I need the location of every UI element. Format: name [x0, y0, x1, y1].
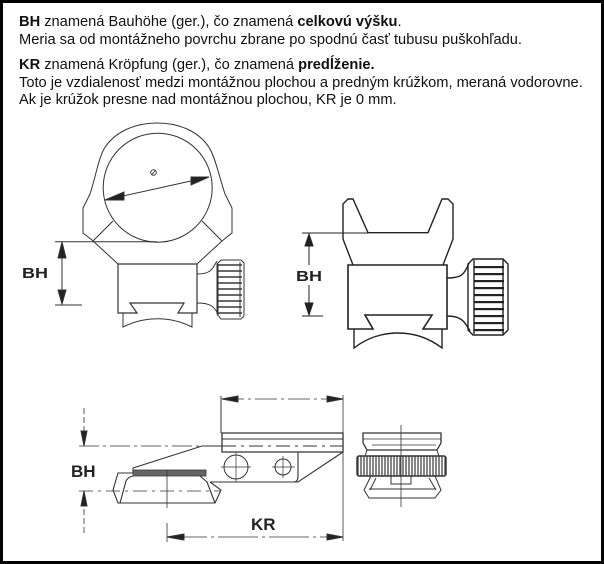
text block: BH definition: Meria sa od montážneho povrchu zbrane po spodnú časť tubusu puškohľadu. [19, 32, 522, 48]
diameter arrow [105, 177, 209, 200]
BH label: BH [296, 268, 322, 285]
ring clamp [113, 470, 221, 503]
BH dimension [55, 242, 157, 305]
center and axis lines [167, 395, 343, 542]
diameter symbol [151, 170, 156, 175]
drawing: front view of ring mount [22, 123, 244, 327]
arm [222, 433, 343, 452]
text block: KR definition [19, 55, 583, 108]
knob [197, 260, 244, 319]
drawing: top view with extension arm [71, 395, 343, 542]
text block: KR definition: KR znamená Kröpfung (ger.), čo znamená predĺženie. [19, 57, 375, 73]
BH dimension [302, 233, 368, 316]
BH dimension [79, 408, 202, 533]
BH label: BH [71, 462, 96, 481]
rail [123, 313, 192, 327]
ring stub [343, 199, 453, 265]
text block: KR definition: Ak je krúžok presne nad montážnou plochou, KR je 0 mm. [19, 92, 397, 108]
knurled wheel [357, 456, 446, 476]
drawing: side view with cut ring [296, 199, 508, 348]
scope tube circle [103, 133, 212, 242]
rail [354, 329, 442, 348]
text block: BH definition: BH znamená Bauhöhe (ger.), čo znamená celkovú výšku. [19, 14, 402, 30]
upper length dimension [221, 396, 343, 433]
text block: BH definition [19, 14, 522, 48]
screw holes [221, 452, 295, 482]
KR label: KR [251, 515, 276, 534]
ring housing [83, 123, 232, 264]
drawing: end view of ring [357, 425, 446, 507]
knob [447, 259, 508, 335]
text block: KR definition: Toto je vzdialenosť medzi montážnou plochou a predným krúžkom, meraná vodorovne. [19, 74, 583, 90]
BH label: BH [22, 265, 48, 282]
KR dimension [167, 488, 343, 541]
mount base [118, 264, 197, 313]
mount base [348, 265, 447, 329]
